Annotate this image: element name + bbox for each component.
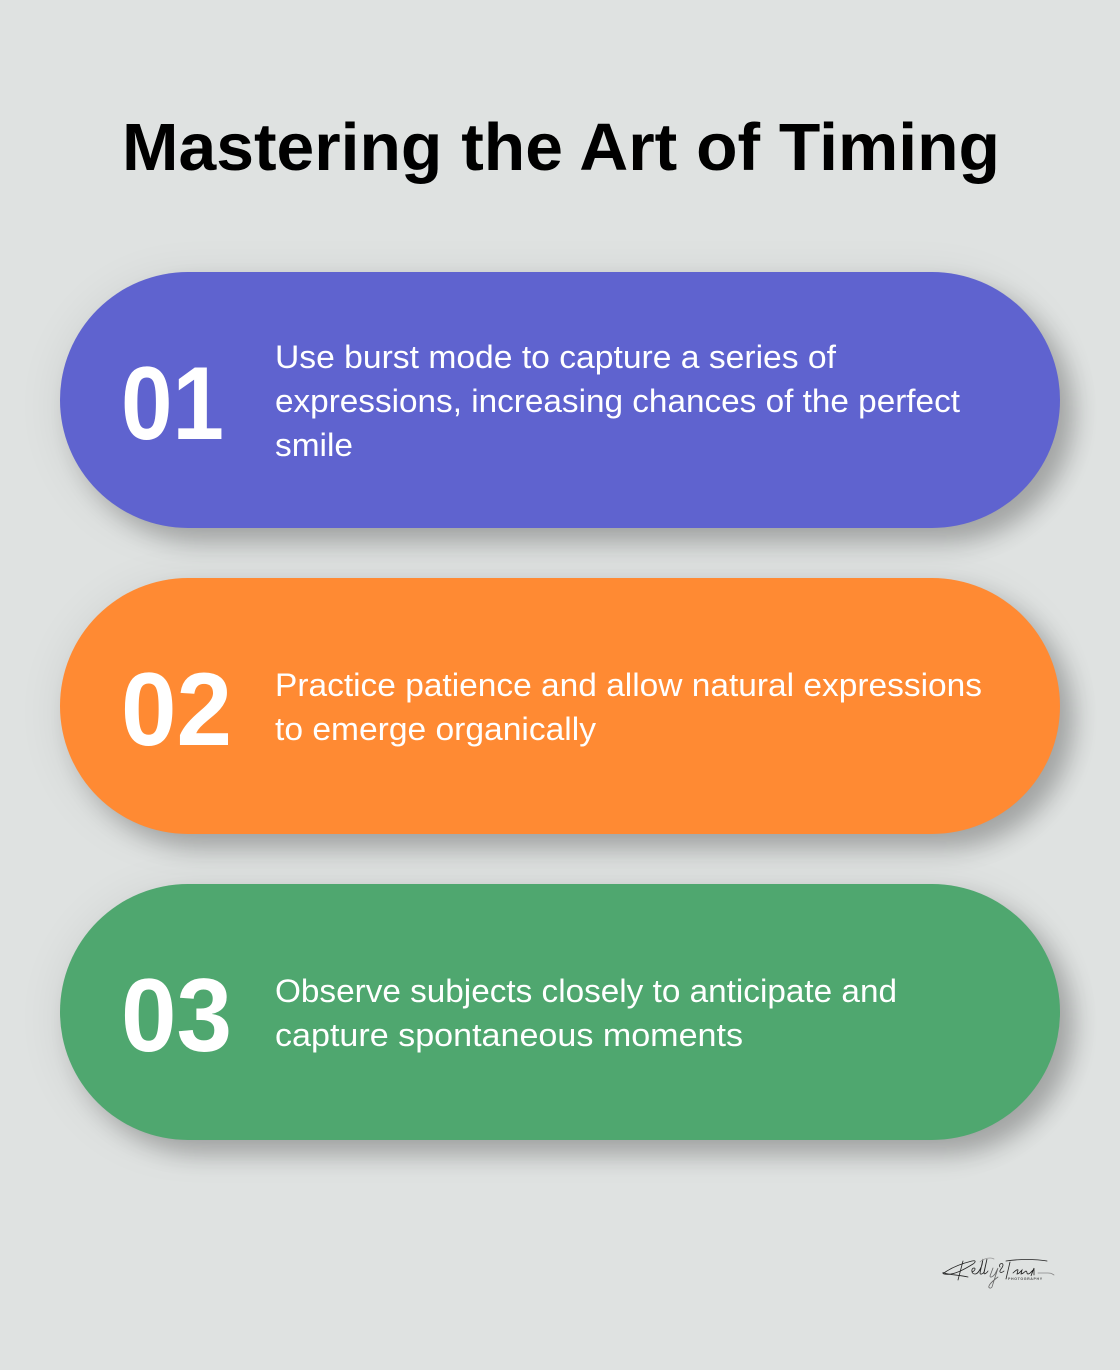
text: step 01: Use burst mode to capture a series of xyxy=(275,339,837,375)
text: step 02: Practice patience and allow natural expressions xyxy=(275,667,982,703)
text: step 02: to emerge organically xyxy=(275,711,597,747)
logo: signature xyxy=(943,1258,1054,1288)
panel: step 02 xyxy=(60,578,1074,848)
text: step 03 xyxy=(275,973,897,1053)
text: step 03: Observe subjects closely to anticipate and xyxy=(275,973,897,1009)
text: step 01: smile xyxy=(275,427,353,463)
text: step 03: capture spontaneous moments xyxy=(275,1017,743,1053)
number 03: 03 xyxy=(121,958,232,1074)
text: step 01: expressions, increasing chances of the perfect xyxy=(275,383,960,419)
title: Mastering the Art of Timing xyxy=(122,110,1000,185)
logo: wordmark: PHOTOGRAPHY xyxy=(1008,1277,1043,1281)
panel: step 01 xyxy=(60,272,1074,542)
text: step 01 xyxy=(275,339,960,463)
number 01: 01 xyxy=(121,346,224,462)
number 02: 02 xyxy=(121,652,232,768)
panel: step 03 xyxy=(60,884,1074,1154)
text: step 02 xyxy=(275,667,982,747)
